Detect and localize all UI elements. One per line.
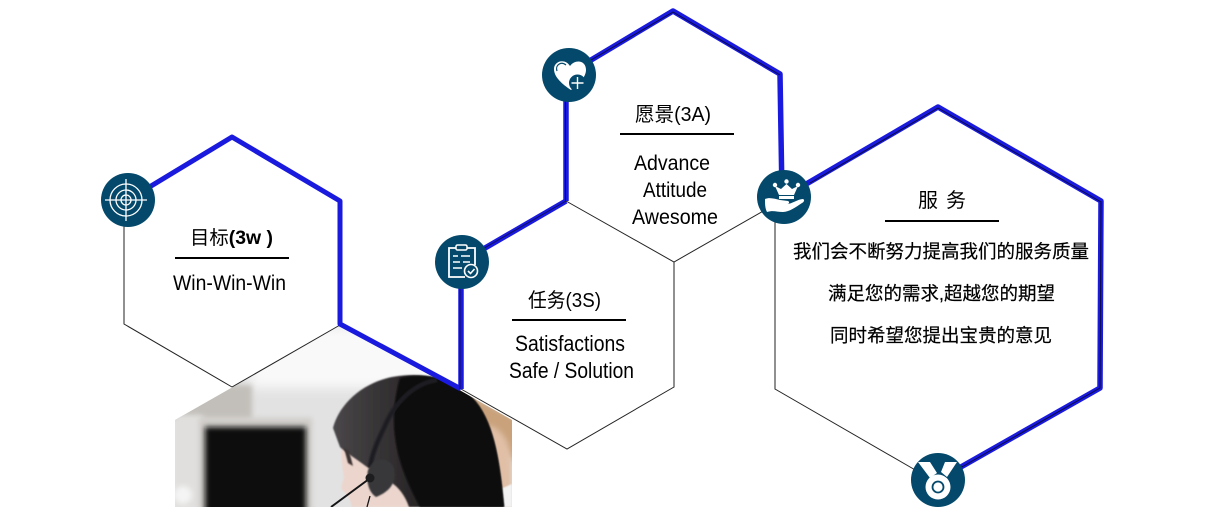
hexagon: mission outline [460, 201, 674, 449]
icon: target [101, 173, 155, 227]
text block: service: 同时希望您提出宝贵的意见 [830, 325, 1052, 346]
photo: call-center agent with headset [160, 326, 520, 507]
text block: service [793, 189, 1089, 346]
text block: vision: Advance [634, 152, 710, 175]
text block: goal: 目标(3w ) [190, 227, 273, 249]
text block: vision: Attitude [643, 179, 707, 202]
text block: vision [620, 104, 734, 229]
icon: clipboard [435, 235, 489, 289]
text block: service: 满足您的需求,超越您的期望 [828, 283, 1055, 304]
text block: goal [173, 227, 289, 295]
text block: mission: 任务(3S) [528, 289, 601, 312]
text block: vision: 愿景(3A) [635, 104, 711, 126]
hexagon: vision outline [566, 11, 782, 262]
text block: service: 服 务 [918, 189, 966, 212]
text block: mission [509, 289, 634, 383]
text block: goal: Win-Win-Win [173, 272, 286, 295]
icon: heart with plus [542, 48, 596, 102]
text block: vision: Awesome [632, 206, 718, 229]
hexagon: service outline [775, 107, 1101, 480]
icon: medal [911, 453, 965, 507]
text block: mission: Safe / Solution [509, 358, 634, 383]
icon: crown in hand [757, 170, 811, 224]
hexagon: goal outline [124, 137, 461, 389]
text block: service: 我们会不断努力提高我们的服务质量 [793, 241, 1089, 262]
text block: mission: Satisfactions [515, 331, 625, 356]
